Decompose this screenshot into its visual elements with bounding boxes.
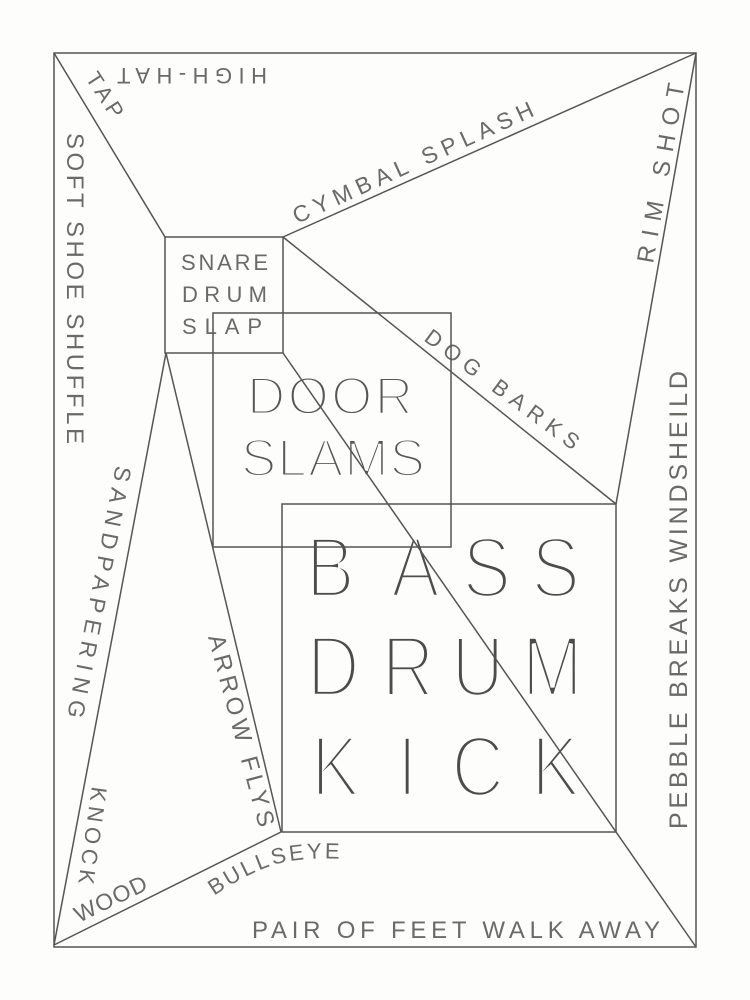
label: bullseye: BULLSEYE: [207, 843, 338, 895]
label: snare drum slap: SNARE: [181, 250, 268, 275]
label: cymbal splash: CYMBAL SPLASH: [288, 96, 537, 229]
label: pair of feet walk away: PAIR OF FEET WALK AWAY: [252, 917, 660, 944]
label: soft shoe shuffle: SOFT SHOE SHUFFLE: [61, 133, 88, 444]
label: pebble breaks windsheild: PEBBLE BREAKS WINDSHEILD: [665, 371, 693, 829]
label: high-hat: HIGH-HAT: [117, 63, 267, 88]
label: snare drum slap: DRUM: [182, 282, 267, 307]
heading: bass drum kick: BASS: [306, 519, 580, 615]
line drawing: frame, squares and perspective lines: [54, 53, 696, 947]
label: sandpapering: SANDPAPERING: [62, 464, 137, 720]
label: dog barks: DOG BARKS: [420, 324, 584, 455]
label: arrow flys: ARROW FLYS: [202, 632, 280, 830]
heading: bass drum kick: [306, 519, 583, 814]
label: wood: WOOD: [70, 870, 151, 927]
label: snare drum slap: SLAP: [182, 314, 262, 339]
heading: door slams: SLAMS: [241, 429, 425, 488]
label: rim shot: RIM SHOT: [632, 81, 691, 265]
heading: door slams: DOOR: [247, 367, 413, 426]
label: tap: TAP: [81, 67, 129, 123]
heading: bass drum kick: KICK: [311, 718, 580, 814]
heading: door slams: [241, 367, 425, 488]
label: snare drum slap: [181, 250, 268, 339]
heading: bass drum kick: DRUM: [307, 618, 583, 714]
label: knock: KNOCK: [73, 785, 112, 886]
